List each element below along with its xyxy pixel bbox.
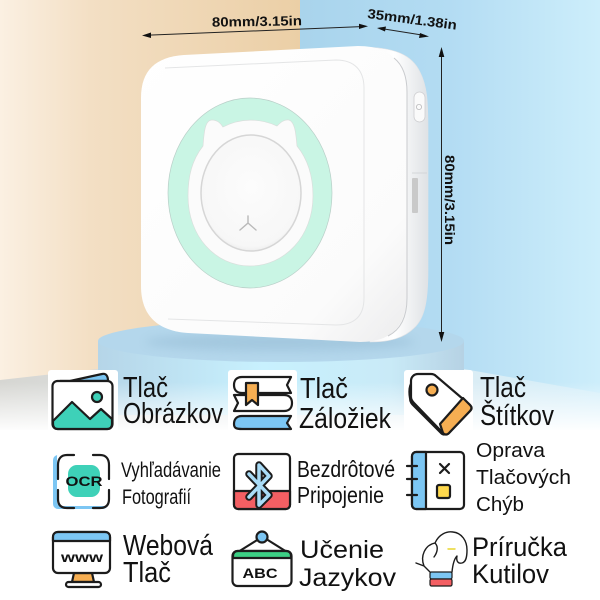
label: Tlačových (476, 467, 571, 489)
feature: print error repair (405, 440, 571, 516)
label: Príručka (472, 532, 568, 562)
feature: language learning (229, 527, 397, 592)
card (228, 370, 297, 439)
feature: label printing (404, 370, 554, 439)
label: Kutilov (472, 559, 549, 589)
power button (414, 92, 425, 122)
background: blue wall (300, 0, 600, 400)
dimension: height: 80mm/3.15in (442, 155, 457, 245)
pedestal (98, 320, 464, 415)
icon: elephant on books (416, 532, 467, 586)
printer device (141, 46, 428, 342)
card (229, 449, 297, 515)
icon: tag (409, 374, 472, 434)
label: Chýb (476, 494, 524, 516)
background: beige wall (0, 0, 300, 382)
label: Záložiek (299, 403, 391, 435)
icon: OCR (53, 452, 113, 509)
card (405, 449, 473, 515)
round button (201, 135, 301, 251)
label: Tlač (123, 372, 168, 404)
background: floor (0, 369, 600, 430)
feature: DIY guide (405, 527, 568, 592)
dimension: width: 80mm/3.15in (212, 13, 302, 30)
cat head (188, 120, 313, 266)
label: Vyhľadávanie (121, 459, 221, 482)
label: Fotografií (122, 486, 191, 509)
label: Tlač (480, 372, 526, 404)
label: Tlač (123, 557, 171, 589)
card (48, 370, 118, 439)
icon: hanging sign (232, 532, 292, 586)
card (50, 527, 118, 592)
label: Jazykov (299, 564, 397, 592)
icon: OCR: OCR (66, 473, 102, 489)
label: Štítkov (480, 398, 554, 432)
label: Pripojenie (297, 482, 384, 508)
printer front shell (141, 46, 407, 342)
label: Bezdrôtové (297, 456, 395, 482)
feature: picture printing (48, 370, 223, 439)
dimension: width (142, 13, 368, 38)
dimension: height (439, 47, 457, 342)
icon: hanging sign: ABC (242, 565, 278, 581)
label: Webová (123, 530, 214, 562)
label: Tlač (300, 373, 348, 405)
button logo (240, 216, 256, 230)
icon: monitor: www (60, 549, 103, 565)
feature: wireless connection (229, 449, 395, 515)
icon: picture (52, 374, 112, 429)
icon: bluetooth (234, 454, 290, 509)
bottom white fade (0, 382, 600, 432)
icon: notebook (407, 452, 464, 509)
feature: web printing (50, 527, 214, 592)
green ring (168, 98, 332, 288)
label: Oprava (476, 440, 546, 462)
printer face panel edge (165, 60, 364, 325)
feature: OCR search (50, 449, 221, 515)
card (229, 527, 297, 592)
card (50, 449, 118, 515)
icon: monitor (53, 532, 110, 587)
feature: bookmark printing (228, 370, 391, 439)
icon: books (234, 377, 292, 429)
card (404, 370, 473, 439)
dimension: depth: 35mm/1.38in (367, 6, 458, 33)
printer side (360, 47, 428, 342)
label: Obrázkov (123, 398, 223, 430)
label: Učenie (300, 536, 384, 564)
card (405, 527, 473, 592)
side seam and usb port (412, 173, 427, 213)
